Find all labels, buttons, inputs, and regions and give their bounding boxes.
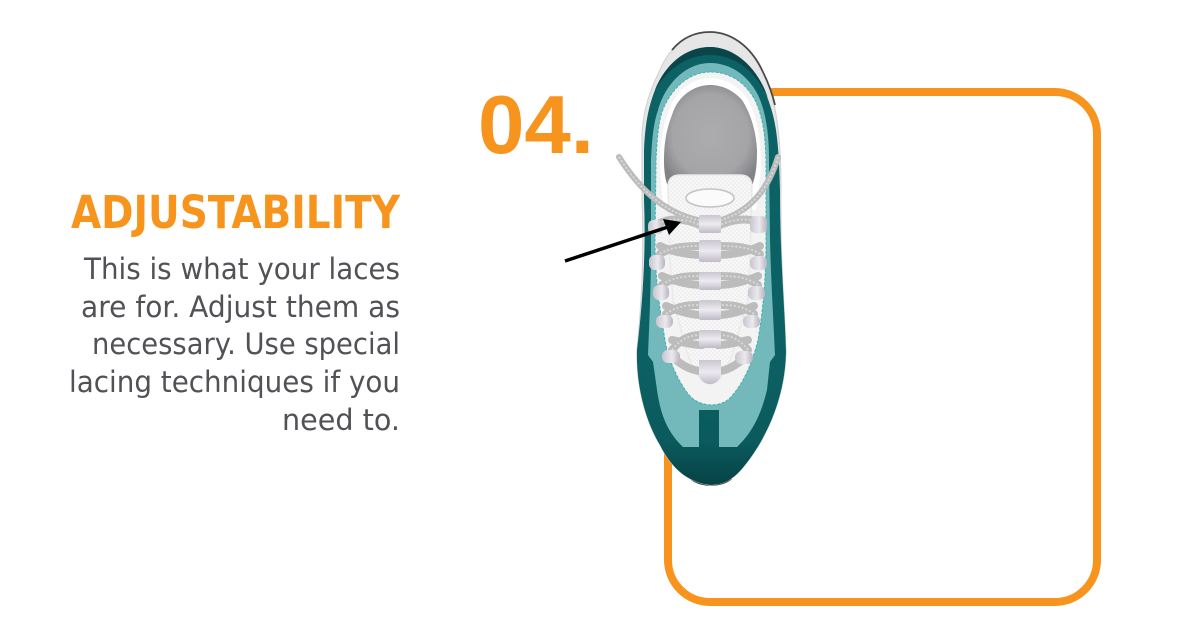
description text: need to. xyxy=(282,403,400,437)
shoe opening lining xyxy=(660,78,761,210)
centre lace tabs xyxy=(699,215,721,384)
arrow pointing to laces xyxy=(565,219,681,261)
description text: This is what your laces xyxy=(83,252,400,286)
side eyelets xyxy=(648,216,767,364)
tongue logo oval xyxy=(686,189,734,207)
orange rounded frame xyxy=(668,92,1097,602)
light teal panel xyxy=(648,63,775,447)
shoe sole rim xyxy=(637,32,786,485)
description text xyxy=(69,252,400,437)
heading: ADJUSTABILITY xyxy=(71,186,401,239)
shoe illustration xyxy=(619,32,786,486)
heel collar darker band xyxy=(655,47,768,98)
lace texture xyxy=(619,157,778,350)
shoe upper dark teal xyxy=(637,47,786,485)
toe shadow xyxy=(690,474,732,486)
shoe interior xyxy=(664,85,757,186)
laces xyxy=(619,157,778,371)
description text: are for. Adjust them as xyxy=(81,290,400,324)
white vamp panel xyxy=(655,72,766,405)
step number: 04. xyxy=(478,78,594,171)
description text: lacing techniques if you xyxy=(69,365,400,399)
dark heel edge xyxy=(672,32,775,105)
description text: necessary. Use special xyxy=(92,327,400,361)
tongue with mesh xyxy=(668,175,752,384)
